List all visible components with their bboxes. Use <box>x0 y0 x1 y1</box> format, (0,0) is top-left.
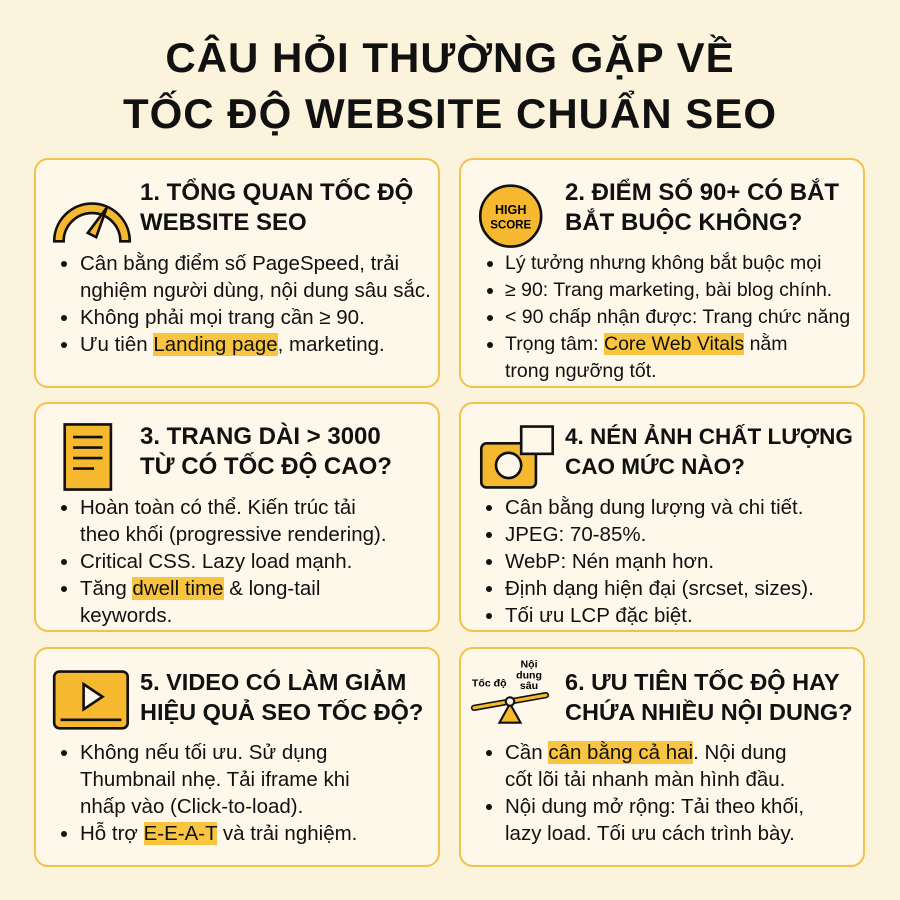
bullets: trong ngưỡng tốt. <box>505 360 657 382</box>
bullets: Lý tưởng nhưng không bắt buộc mọi <box>505 252 821 274</box>
heading: BẮT BUỘC KHÔNG? <box>565 209 802 236</box>
bullets: Critical CSS. Lazy load mạnh. <box>80 550 352 573</box>
heading: CHỨA NHIỀU NỘI DUNG? <box>565 699 853 725</box>
icon: high score badge: SCORE <box>490 220 532 232</box>
bullets: Tăng dwell time & long-tail <box>80 577 320 600</box>
bullets: keywords. <box>80 604 172 627</box>
bullets: Ưu tiên Landing page, marketing. <box>80 333 385 356</box>
icon: speedometer <box>52 202 132 243</box>
title: TỐC ĐỘ WEBSITE CHUẨN SEO <box>123 90 777 137</box>
bullets: cốt lõi tải nhanh màn hình đầu. <box>505 768 785 791</box>
bullets: Định dạng hiện đại (srcset, sizes). <box>505 577 814 600</box>
heading: TỪ CÓ TỐC ĐỘ CAO? <box>140 453 392 480</box>
bullets: Cân bằng điểm số PageSpeed, trải <box>80 252 399 275</box>
icon: scroll <box>63 423 112 491</box>
icon: high score badge: HIGH <box>495 203 526 217</box>
bullets: lazy load. Tối ưu cách trình bày. <box>505 822 795 845</box>
bullets: Hỗ trợ E-E-A-T và trải nghiệm. <box>80 822 357 845</box>
bullets <box>61 252 431 356</box>
panel: 2 <box>459 158 865 388</box>
bullets <box>486 741 804 845</box>
bullets: WebP: Nén mạnh hơn. <box>505 550 714 573</box>
heading: 4. NÉN ẢNH CHẤT LƯỢNG <box>565 424 853 449</box>
icon: high score badge <box>478 184 542 248</box>
bullets: Tối ưu LCP đặc biệt. <box>505 604 693 627</box>
heading <box>140 669 423 725</box>
heading <box>140 422 392 480</box>
heading <box>565 669 853 725</box>
bullets: Không phải mọi trang cần ≥ 90. <box>80 306 365 329</box>
bullets <box>61 496 387 627</box>
bullets: Hoàn toàn có thể. Kiến trúc tải <box>80 496 356 519</box>
heading <box>565 178 839 236</box>
title <box>123 34 777 137</box>
heading: 1. TỔNG QUAN TỐC ĐỘ <box>140 179 413 206</box>
panel: 6 <box>459 647 865 867</box>
icon: balance scale: sâu <box>520 680 538 692</box>
bullets: Trọng tâm: Core Web Vitals nằm <box>505 333 788 355</box>
bullets <box>487 252 850 382</box>
icon: balance scale: dung <box>516 669 542 681</box>
heading <box>565 424 853 479</box>
heading: 2. ĐIỂM SỐ 90+ CÓ BẮT <box>565 179 839 206</box>
heading: CAO MỨC NÀO? <box>565 454 745 479</box>
bullets: Không nếu tối ưu. Sử dụng <box>80 741 327 764</box>
icon: balance scale: Tốc độ <box>472 678 507 690</box>
bullets: nhấp vào (Click-to-load). <box>80 795 303 818</box>
title: CÂU HỎI THƯỜNG GẶP VỀ <box>165 34 735 81</box>
bullets: < 90 chấp nhận được: Trang chức năng <box>505 306 850 328</box>
bullets: theo khối (progressive rendering). <box>80 523 387 546</box>
panel: 1 <box>34 158 440 388</box>
bullets: Thumbnail nhẹ. Tải iframe khi <box>80 768 350 791</box>
heading: WEBSITE SEO <box>140 209 307 236</box>
panel: 4 <box>459 402 865 632</box>
heading: HIỆU QUẢ SEO TỐC ĐỘ? <box>140 699 423 725</box>
heading <box>140 178 413 236</box>
icon: balance scale: Nội <box>521 659 538 671</box>
heading: 3. TRANG DÀI > 3000 <box>140 423 381 450</box>
bullets: ≥ 90: Trang marketing, bài blog chính. <box>505 279 832 301</box>
bullets: Cần cân bằng cả hai. Nội dung <box>505 741 787 764</box>
bullets: Nội dung mở rộng: Tải theo khối, <box>505 795 804 818</box>
bullets: JPEG: 70-85%. <box>505 523 646 546</box>
bullets: Cân bằng dung lượng và chi tiết. <box>505 496 803 519</box>
icon: video player <box>52 670 129 730</box>
panel: 3 <box>34 402 440 632</box>
panel: 5 <box>34 647 440 867</box>
icon: balance scale <box>470 659 550 724</box>
heading: 6. ƯU TIÊN TỐC ĐỘ HAY <box>565 669 840 695</box>
bullets <box>61 741 357 845</box>
heading: 5. VIDEO CÓ LÀM GIẢM <box>140 669 406 695</box>
icon: camera <box>480 425 554 489</box>
bullets: nghiệm người dùng, nội dung sâu sắc. <box>80 279 431 302</box>
bullets <box>486 496 814 627</box>
